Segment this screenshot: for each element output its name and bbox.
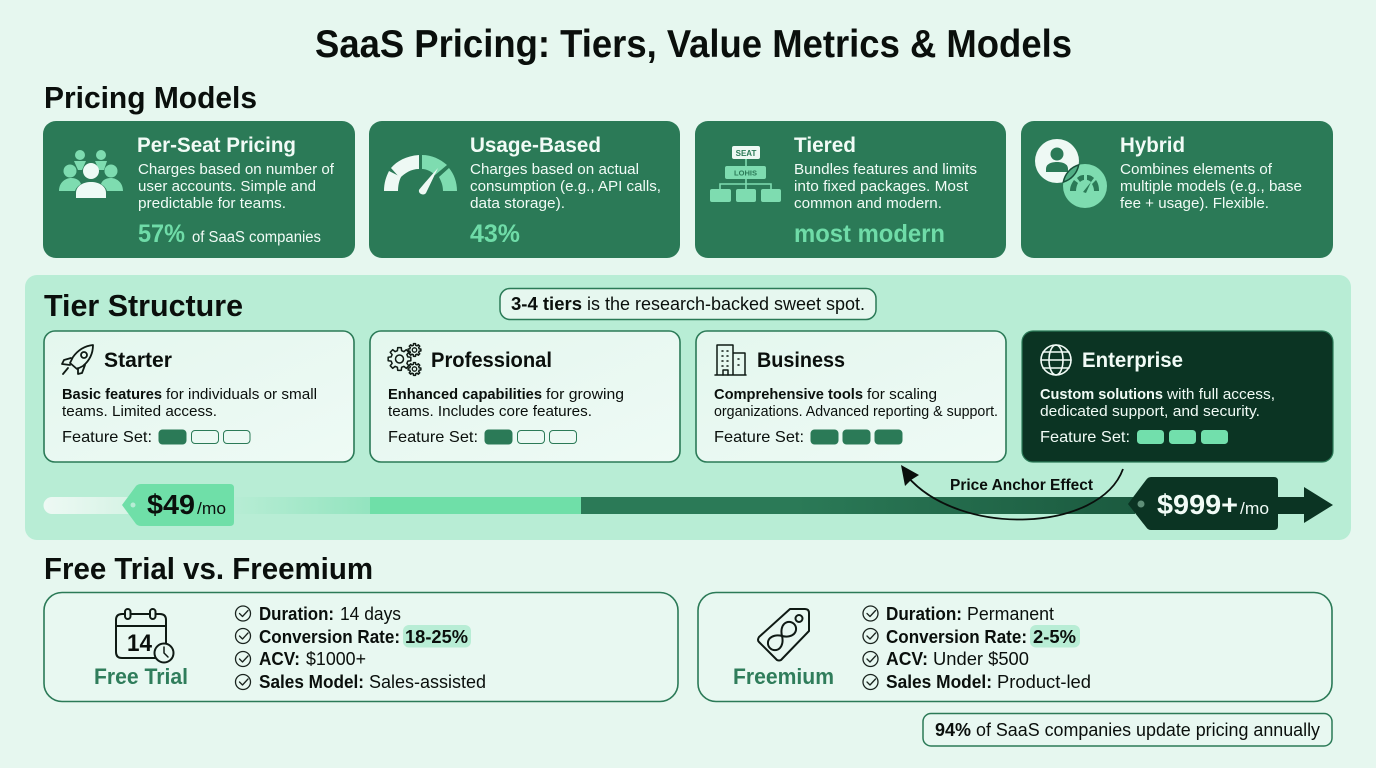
icon: gauge [384,155,457,194]
checklist: freemium: Sales Model: [886,672,992,692]
description: predictable for teams. [138,195,286,212]
heading: Hybrid [1120,134,1185,157]
checklist: freemium: Under $500 [933,649,1029,669]
feature set meter [388,429,576,446]
checklist: freemium: 2-5% [1033,627,1076,647]
description [714,386,998,420]
feature set meter: Feature Set: [62,429,152,446]
icon: rocket [62,345,93,374]
panel: freemium [698,592,1332,702]
arrow: price anchor effect: Price Anchor Effect [950,477,1093,494]
callout: annual pricing updates: of SaaS companies update pricing annually [976,720,1320,740]
price tag: $49: $49 [147,489,195,520]
checklist: free trial: Sales Model: [259,672,364,692]
description: user accounts. Simple and [138,178,316,195]
description [138,161,335,212]
heading: Professional [431,349,552,372]
checklist: free trial: Sales-assisted [369,672,486,692]
description: Bundles features and limits [794,161,977,178]
checklist: freemium: Conversion Rate: [886,627,1027,647]
checklist: free trial [236,604,486,692]
heading: Business [757,349,845,372]
checklist: free trial: $1000+ [306,649,366,669]
description: fee + usage). Flexible. [1120,195,1269,212]
description [1040,386,1275,420]
highlight [403,625,471,648]
description: Combines elements of [1120,161,1273,178]
icon: infinity price tag [758,609,809,660]
price tag: $49: /mo [197,500,226,518]
icon: calendar with clock [116,609,174,662]
callout: sweet spot: is the research-backed sweet spot. [587,294,865,314]
stat: 43% [470,220,520,248]
panel: tier structure [25,275,1351,540]
panel: tiered [695,121,1006,258]
description: data storage). [470,195,565,212]
icon: globe [1041,345,1071,375]
callout: sweet spot [500,288,876,320]
checklist: freemium: Permanent [967,604,1054,624]
feature set meter: Feature Set: [714,429,804,446]
stat: most modern [794,220,945,248]
description [388,386,624,420]
heading: Enterprise [1082,349,1183,372]
checklist: free trial: Duration: [259,604,334,624]
description: Charges based on number of [138,161,335,178]
description [1120,161,1302,212]
price bar arrow [44,487,1333,523]
description [794,161,977,212]
stat: 57% [138,220,185,248]
price tag: $999+ [1128,477,1278,530]
price tag: $49 [122,484,234,526]
panel: per-seat pricing [43,121,355,258]
checklist: free trial: 14 days [340,604,401,624]
description: Enhanced capabilities [388,386,542,403]
callout: sweet spot: 3-4 tiers [511,294,582,314]
description: consumption (e.g., API calls, [470,178,661,195]
feature set meter: Feature Set: [388,429,478,446]
checklist: freemium: Duration: [886,604,962,624]
callout: annual pricing updates: 94% [935,720,971,740]
panel: free trial [44,592,678,702]
feature set meter: Feature Set: [1040,429,1130,446]
description [470,161,661,212]
feature set meter [714,429,902,446]
arrow: price anchor effect [901,465,1123,520]
feature set meter [1040,429,1228,446]
icon: tier diagram: SEAT [736,149,756,158]
highlight [1030,625,1080,648]
title: SaaS Pricing: Tiers, Value Metrics & Models [315,23,1072,66]
icon: calendar with clock: 14 [127,630,153,657]
checklist: freemium: ACV: [886,649,928,669]
icon: tier diagram [710,146,781,202]
checklist: free trial: Conversion Rate: [259,627,400,647]
heading: tier structure: Tier Structure [44,288,243,323]
description: dedicated support, and security. [1040,403,1260,420]
description: Custom solutions [1040,386,1163,403]
card: starter [44,331,354,462]
description: teams. Limited access. [62,403,217,420]
description: teams. Includes core features. [388,403,592,420]
card: professional [370,331,680,462]
icon: gears [388,344,421,375]
description: Comprehensive tools [714,386,863,403]
heading: Starter [104,349,172,372]
panel: hybrid [1021,121,1333,258]
icon: office building [715,345,746,375]
price tag: $999+: $999+ [1157,489,1238,520]
card: enterprise [1022,331,1333,462]
stat [138,220,321,248]
description: with full access, [1166,386,1275,403]
description: for individuals or small [166,386,317,403]
checklist: free trial: 18-25% [405,627,468,647]
checklist: freemium: Product-led [997,672,1091,692]
checklist: freemium [863,604,1091,692]
description: into fixed packages. Most [794,178,969,195]
card: business [696,331,1006,462]
callout: annual pricing updates [923,714,1332,746]
heading: free trial vs freemium: Free Trial vs. Freemium [44,551,373,586]
heading: Per-Seat Pricing [137,134,296,157]
icon: person and gauge [1035,139,1107,208]
icon: group of people [59,150,123,198]
description: multiple models (e.g., base [1120,178,1302,195]
panel: usage-based [369,121,680,258]
heading: pricing models: Pricing Models [44,80,257,115]
stat: of SaaS companies [192,229,321,246]
description: for scaling [867,386,937,403]
heading: Tiered [794,134,856,157]
checklist: free trial: ACV: [259,649,300,669]
description: Charges based on actual [470,161,639,178]
description: Basic features [62,386,162,403]
description: for growing [546,386,624,403]
feature set meter [62,429,250,446]
label: Free Trial [94,664,188,689]
description [62,386,317,420]
price tag: $999+: /mo [1240,500,1269,518]
label: Freemium [733,664,834,689]
heading: Usage-Based [470,134,601,157]
icon: tier diagram: LOHIS [734,168,757,178]
description: organizations. Advanced reporting & support. [714,403,998,420]
description: common and modern. [794,195,942,212]
